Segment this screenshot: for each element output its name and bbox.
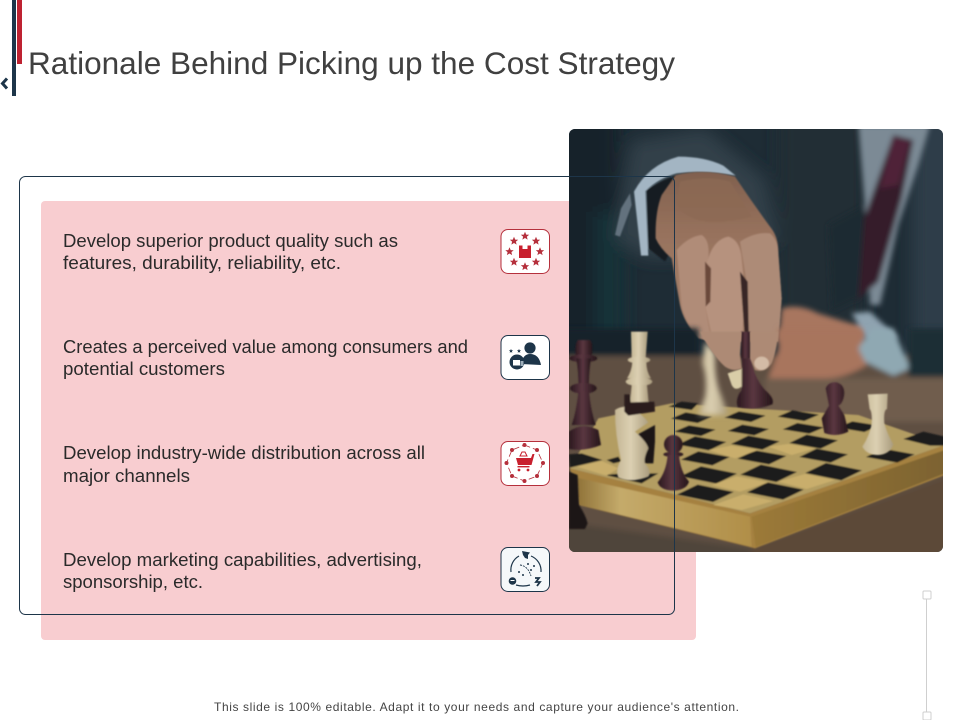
icon: shopping cart in network ring <box>501 442 550 486</box>
main hand <box>656 172 782 342</box>
text block: product quality: features, durability, reliability, etc. <box>63 252 341 273</box>
text block: marketing <box>63 549 422 592</box>
white knight <box>615 407 650 480</box>
text block: perceived value <box>63 336 468 379</box>
dark pawn <box>658 435 689 491</box>
photo: chess player's hand moving a piece <box>569 129 943 552</box>
text block: perceived value: Creates a perceived value among consumers and <box>63 336 468 357</box>
shirt cuff <box>646 176 675 262</box>
board top <box>570 403 945 513</box>
dark piece top <box>624 394 655 416</box>
white piece behind hand <box>698 342 728 415</box>
text block: distribution <box>63 442 425 486</box>
icon: back chevron <box>2 78 7 88</box>
white piece back left <box>626 332 652 407</box>
text block: marketing: Develop marketing capabilities, advertising, <box>63 549 422 570</box>
text block: distribution: major channels <box>63 465 190 486</box>
text block: marketing: sponsorship, etc. <box>63 571 203 592</box>
footer note: This slide is 100% editable. Adapt it to your needs and capture your audience's attention. <box>214 700 739 714</box>
second hand lower part <box>768 328 867 378</box>
title: Rationale Behind Picking up the Cost Strategy <box>28 45 675 81</box>
right dark pawn <box>822 382 848 435</box>
dark squares <box>569 402 945 502</box>
table and board <box>558 328 952 562</box>
text block: product quality <box>63 230 398 273</box>
board frame <box>570 445 945 548</box>
held dark pawn <box>737 332 773 408</box>
dark king left <box>569 340 601 450</box>
icon: customer with thumbs up <box>501 336 550 380</box>
header accent bars <box>12 0 22 96</box>
text block: product quality: Develop superior product quality such as <box>63 230 398 251</box>
icon: marketing strategy cycle <box>501 548 550 592</box>
dark blurred piece behind knight <box>637 425 655 463</box>
fingertips over held pawn <box>700 332 778 371</box>
white rook <box>862 394 893 455</box>
outline frame <box>20 176 674 614</box>
slider control <box>923 591 931 720</box>
icon: product with ring of stars <box>501 230 550 274</box>
text block: distribution: Develop industry-wide distribution across all <box>63 442 425 463</box>
light square highlights <box>577 444 835 510</box>
panel: pink background <box>41 201 696 640</box>
text block: perceived value: potential customers <box>63 358 225 379</box>
second hand behind <box>778 307 898 342</box>
foreground dark piece <box>569 472 588 529</box>
